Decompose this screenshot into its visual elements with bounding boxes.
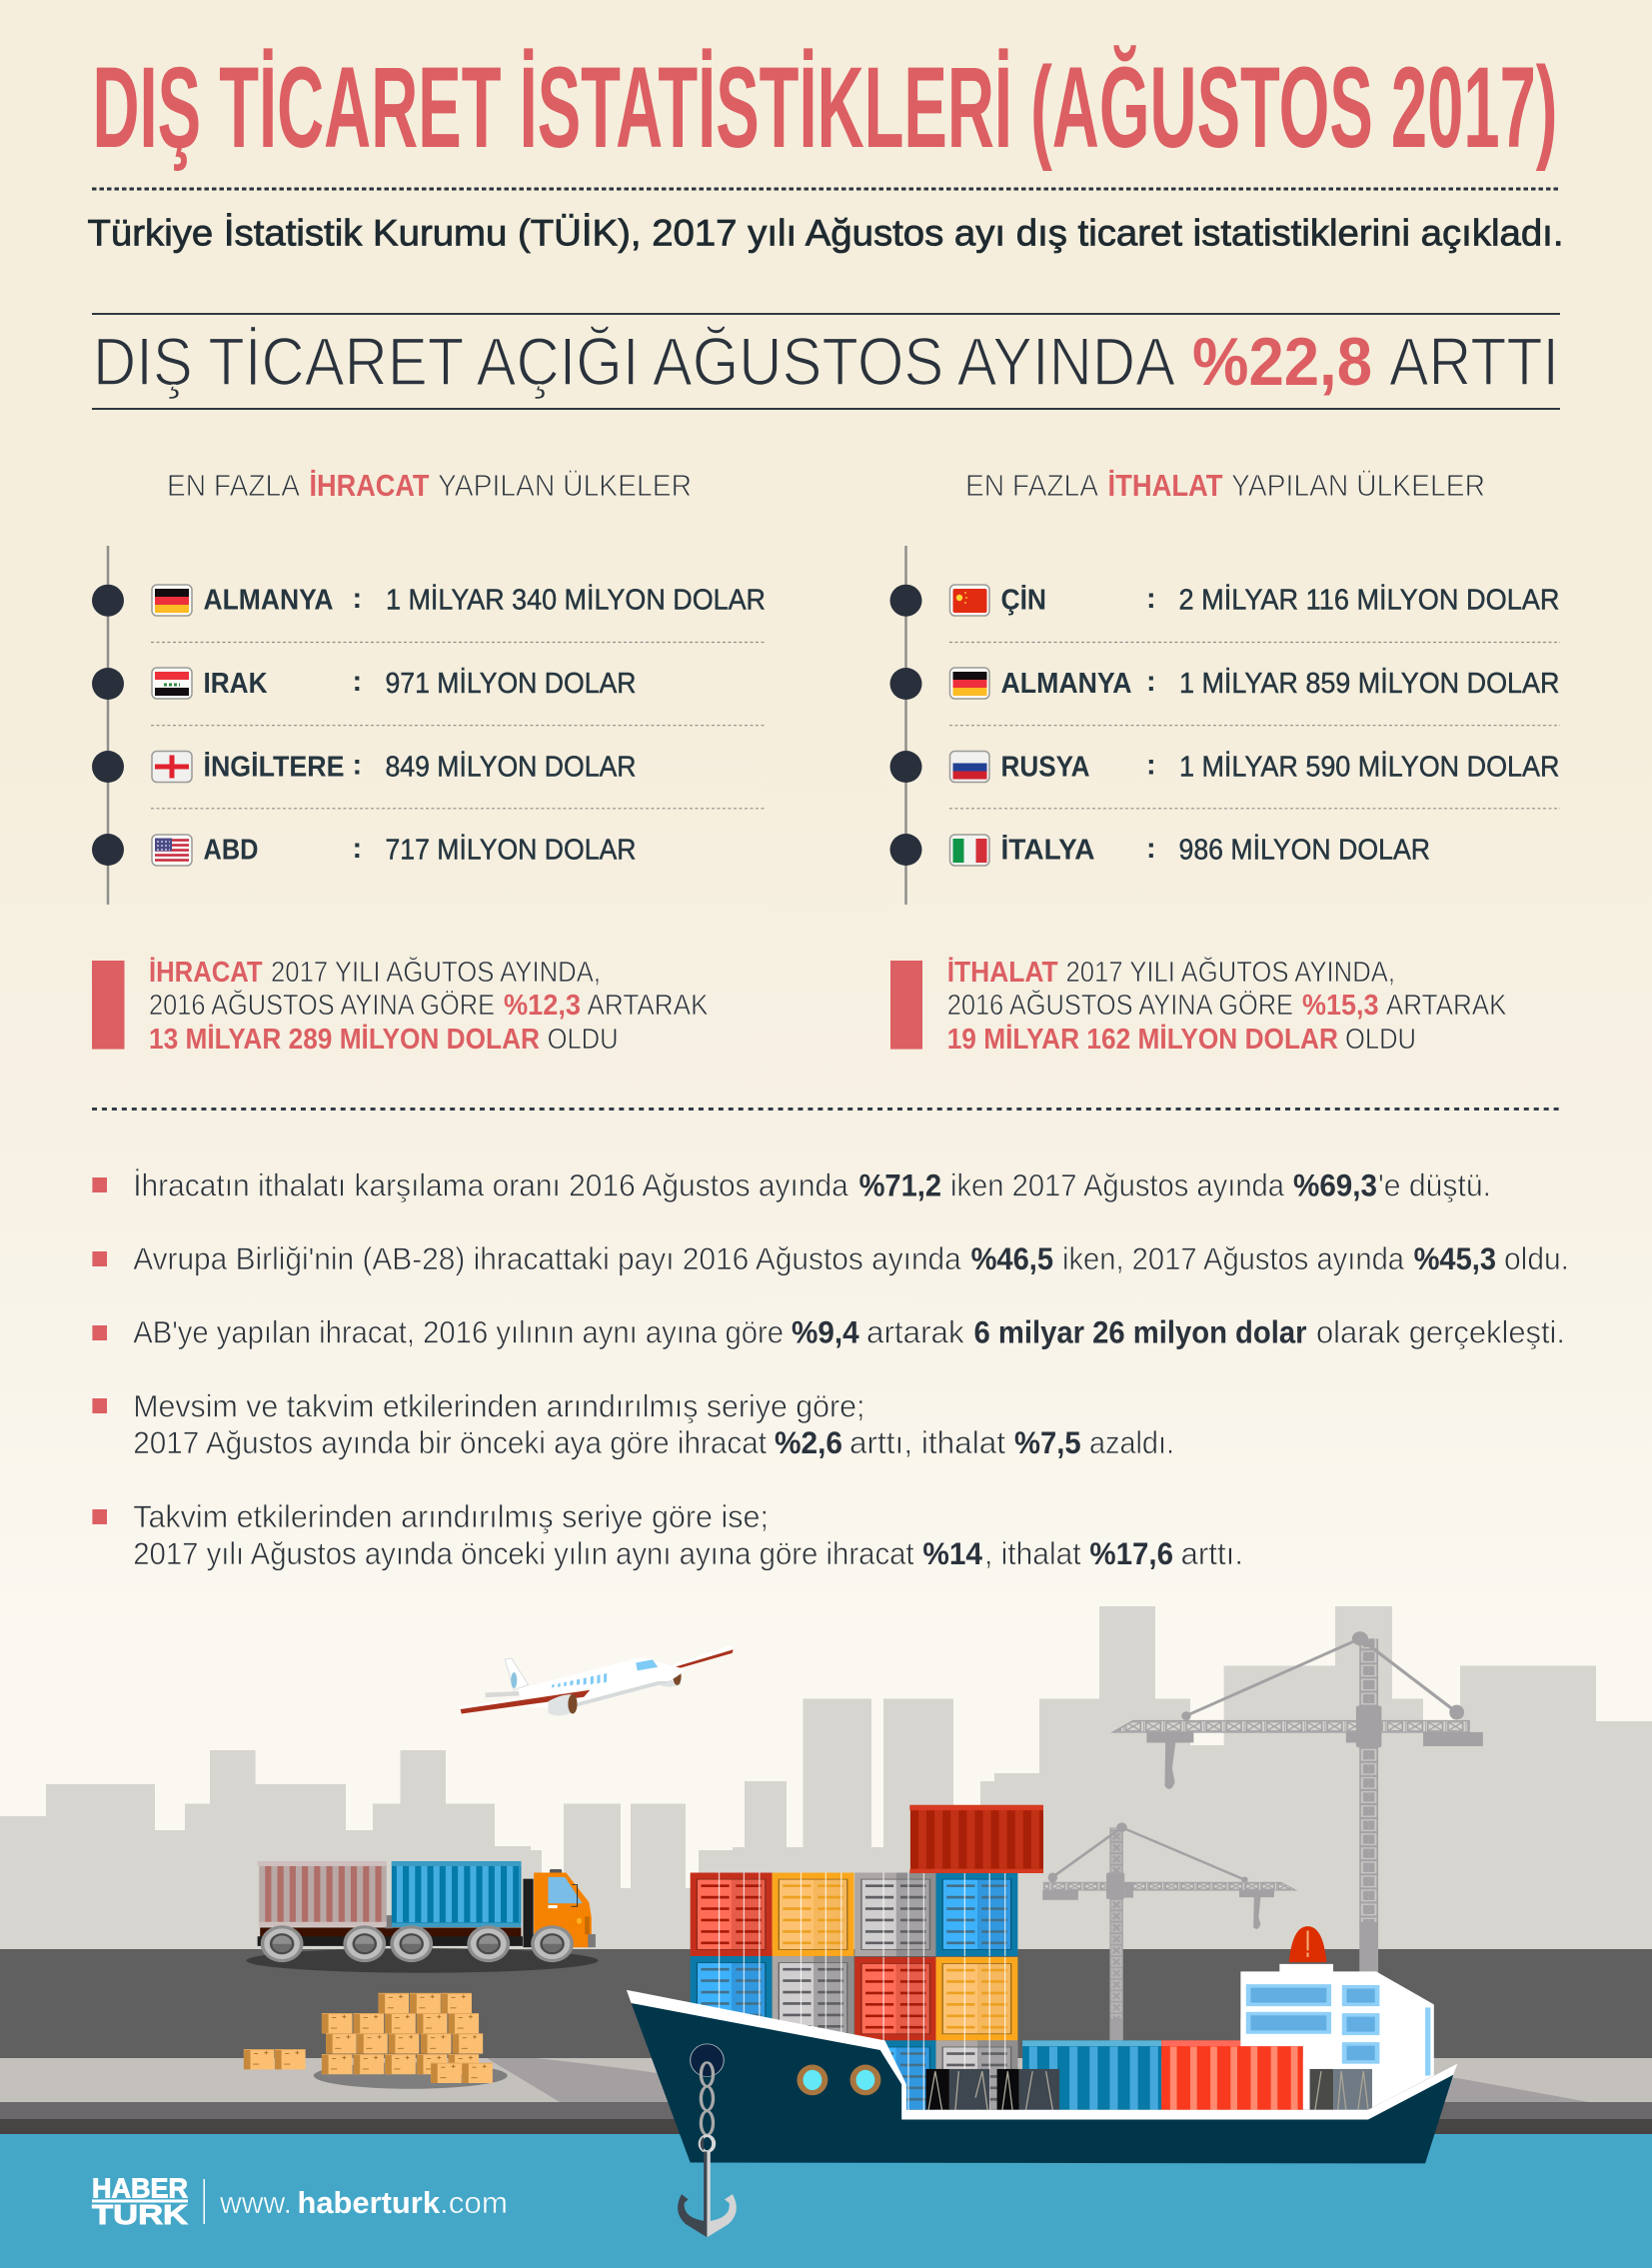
bullet 1: 'e düştü. [1378, 1167, 1491, 1203]
heading: top export countries: EN FAZLA [167, 469, 301, 503]
row: Almanya [152, 583, 766, 616]
row: ABD: 717 MİLYON DOLAR [386, 834, 636, 866]
logo: TURK [92, 2199, 188, 2230]
icon: anchor and chain [678, 2062, 737, 2237]
website: .com [440, 2185, 508, 2220]
bullet 3: AB'ye yapılan ihracat, 2016 yılının aynı ayına göre [133, 1313, 784, 1349]
bullet 5: , ithalat [984, 1535, 1081, 1571]
heading: top import countries [965, 469, 1485, 503]
row: Almanya: : [352, 583, 362, 615]
bullet 4: Mevsim ve takvim etkilerinden arındırılmış seriye göre; [133, 1387, 864, 1423]
headline: ARTTI [1389, 324, 1559, 400]
bullet 2: oldu. [1504, 1240, 1569, 1276]
road and quay [0, 1949, 1652, 2134]
website: haberturk [298, 2185, 441, 2220]
headline: DIŞ TİCARET AÇIĞI AĞUSTOS AYINDA [93, 324, 1176, 400]
deck container: blue [1022, 2040, 1161, 2110]
row: İtalya: İTALYA [1001, 834, 1095, 866]
icon: large crane [1113, 1631, 1483, 1974]
callout: import summary: %15,3 [1302, 990, 1379, 1022]
callout: export summary [92, 956, 709, 1056]
bullet 2: %46,5 [971, 1240, 1053, 1276]
bullet 5: %17,6 [1089, 1535, 1173, 1571]
panel: export countries list [92, 546, 766, 905]
trailer container: grey-red [258, 1861, 387, 1927]
bullet 3: %9,4 [792, 1313, 859, 1349]
logo: HABER [92, 2173, 188, 2204]
bullet 3: olarak gerçekleşti. [1316, 1313, 1565, 1349]
superstructure [1240, 1926, 1434, 2110]
bullet 4: %7,5 [1014, 1424, 1081, 1460]
deck container: red [1161, 2040, 1304, 2110]
row: ABD: ABD [204, 834, 258, 866]
logo [92, 2173, 205, 2230]
row: Almanya: : [1146, 666, 1156, 698]
bullet 4 [92, 1387, 1174, 1460]
bullet 4: %2,6 [775, 1424, 842, 1460]
row: İngiltere [152, 750, 636, 784]
row: Irak: : [352, 666, 362, 698]
callout: import summary: İTHALAT [947, 957, 1058, 989]
loose cartons [244, 2049, 306, 2069]
heading: top import countries: İTHALAT [1107, 469, 1223, 503]
callout: export summary: İHRACAT [149, 957, 263, 989]
row: Çin [949, 583, 1559, 616]
bullet 1: %71,2 [859, 1167, 941, 1203]
callout: import summary [890, 956, 1507, 1056]
bullet 5 [92, 1498, 1243, 1571]
callout: import summary: ARTARAK [1386, 990, 1507, 1022]
illustration group: zoom-4 coordinate space [244, 1645, 734, 2089]
heading: top import countries: EN FAZLA [965, 469, 1099, 503]
callout: export summary: OLDU [548, 1024, 619, 1056]
row: İngiltere: İNGİLTERE [204, 752, 344, 784]
row: Almanya: 1 MİLYAR 340 MİLYON DOLAR [386, 584, 766, 616]
row: İngiltere: 849 MİLYON DOLAR [386, 750, 636, 784]
row: İtalya [949, 833, 1430, 866]
bullet 1: İhracatın ithalatı karşılama oranı 2016 Ağustos ayında [133, 1167, 848, 1203]
row: Irak: IRAK [204, 668, 268, 700]
panel: import countries list [889, 546, 1560, 905]
row: Almanya [949, 666, 1559, 700]
callout: export summary: 2016 AĞUSTOS AYINA GÖRE [149, 989, 495, 1022]
heading: top export countries [167, 469, 692, 503]
bullet 1: iken 2017 Ağustos ayında [950, 1167, 1284, 1203]
ship hull [627, 1990, 1457, 2163]
row: ABD [152, 833, 636, 866]
row: Rusya: 1 MİLYAR 590 MİLYON DOLAR [1179, 750, 1559, 784]
callout: import summary: 2017 YILI AĞUTOS AYINDA, [1065, 956, 1395, 989]
headline: %22,8 [1192, 324, 1372, 400]
website [219, 2185, 508, 2220]
stacked containers [691, 1873, 1017, 2124]
bullet 1 [92, 1167, 1491, 1203]
subtitle: Türkiye İstatistik Kurumu (TÜİK), 2017 yılı Ağustos ayı dış ticaret istatistiklerini açıkladı. [88, 212, 1564, 254]
cartons pile [314, 1993, 508, 2089]
illustration group: zoom-5 coordinate space [627, 1631, 1483, 2237]
row: Irak [152, 666, 636, 700]
row: Almanya: ALMANYA [204, 584, 334, 616]
callout: export summary: ARTARAK [588, 990, 709, 1022]
row: İngiltere: : [352, 750, 362, 782]
sea [0, 2134, 1652, 2268]
row: İtalya: : [1146, 833, 1156, 865]
wheels [261, 1925, 574, 1962]
callout: import summary: 2016 AĞUSTOS AYINA GÖRE [947, 989, 1293, 1022]
row: Çin: 2 MİLYAR 116 MİLYON DOLAR [1179, 584, 1559, 616]
icon: red siren [1289, 1926, 1326, 1962]
bullet 3: 6 milyar 26 milyon dolar [973, 1313, 1307, 1349]
bullet 2: Avrupa Birliği'nin (AB-28) ihracattaki payı 2016 Ağustos ayında [133, 1240, 961, 1276]
heading: top export countries: İHRACAT [310, 469, 430, 503]
dark crates on deck [925, 2069, 1372, 2110]
bullet 1: %69,3 [1293, 1167, 1377, 1203]
callout: import summary: 19 MİLYAR 162 MİLYON DOLAR [947, 1024, 1338, 1056]
icon: portholes [797, 2065, 880, 2095]
row: Çin: ÇİN [1001, 584, 1046, 616]
top red container [909, 1805, 1043, 1873]
trailer container: blue [392, 1861, 521, 1927]
callout: import summary: OLDU [1345, 1024, 1416, 1056]
website: www. [219, 2185, 292, 2220]
bullet 4: azaldı. [1089, 1424, 1174, 1460]
row: Rusya [949, 750, 1559, 784]
row: Rusya: RUSYA [1001, 752, 1090, 784]
heading: top import countries: YAPILAN ÜLKELER [1231, 469, 1485, 503]
icon: small crane [1042, 1822, 1295, 2041]
heading: top export countries: YAPILAN ÜLKELER [438, 469, 692, 503]
icon: airplane [459, 1645, 734, 1715]
callout: export summary: %12,3 [504, 990, 581, 1022]
row: Almanya: ALMANYA [1001, 668, 1132, 700]
text block: bullet list [92, 1167, 1569, 1571]
bullet 4: arttı, ithalat [849, 1424, 1005, 1460]
bullet 2 [92, 1240, 1569, 1276]
bullet 2: iken, 2017 Ağustos ayında [1062, 1240, 1404, 1276]
row: Rusya: : [1146, 750, 1156, 782]
row: Çin: : [1146, 583, 1156, 615]
row: ABD: : [352, 833, 362, 865]
bullet 5: %14 [922, 1535, 982, 1571]
icon: truck [246, 1861, 598, 1973]
bullet 3 [92, 1313, 1565, 1349]
bullet 5: arttı. [1181, 1535, 1243, 1571]
callout: export summary: 2017 YILI AĞUTOS AYINDA, [271, 956, 601, 989]
bullet 4: 2017 Ağustos ayında bir önceki aya göre ihracat [133, 1424, 767, 1460]
row: Almanya: 1 MİLYAR 859 MİLYON DOLAR [1179, 667, 1559, 700]
row: Irak: 971 MİLYON DOLAR [386, 667, 636, 700]
bullet 5: Takvim etkilerinden arındırılmış seriye göre ise; [133, 1498, 769, 1534]
bullet 3: artarak [866, 1313, 964, 1349]
city skyline [0, 1606, 1652, 1959]
callout: export summary: 13 MİLYAR 289 MİLYON DOLAR [149, 1024, 540, 1056]
bullet 2: %45,3 [1414, 1240, 1496, 1276]
bullet 5: 2017 yılı Ağustos ayında önceki yılın aynı ayına göre ihracat [133, 1535, 914, 1571]
row: İtalya: 986 MİLYON DOLAR [1179, 834, 1430, 866]
